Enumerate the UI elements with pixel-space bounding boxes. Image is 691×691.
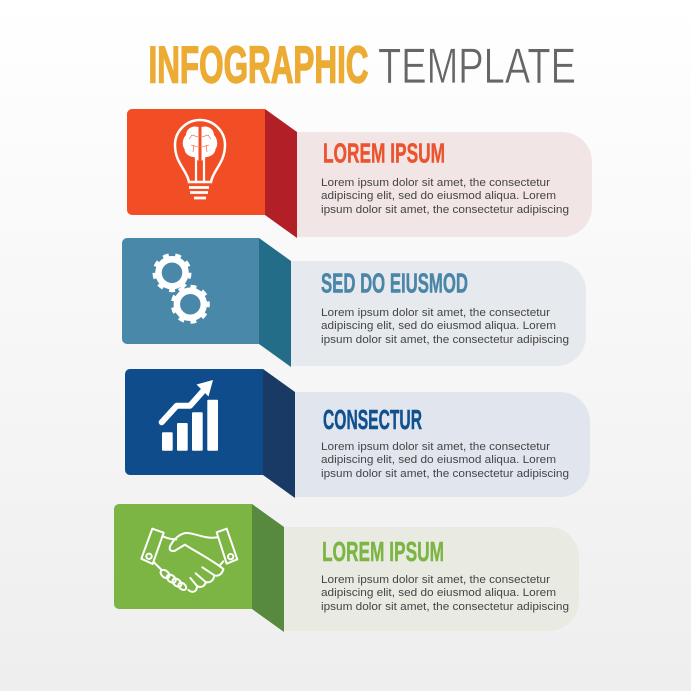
heading: SED DO EIUSMOD (321, 268, 468, 298)
icon tile (127, 109, 265, 215)
icon tile (125, 369, 263, 475)
text card (291, 261, 586, 366)
body text (321, 441, 569, 480)
body text: adipiscing elit, sed do eiusmod aliqua. Lorem (321, 454, 556, 466)
body text: ipsum dolor sit amet, the consectetur adipiscing (321, 468, 569, 480)
heading: LOREM IPSUM (323, 138, 445, 168)
body text: adipiscing elit, sed do eiusmod aliqua. Lorem (321, 190, 556, 202)
icon tile (114, 504, 252, 609)
panel: sed do eiusmod blue (122, 238, 586, 367)
text card (297, 132, 592, 237)
panel: consectur navy (125, 369, 590, 498)
body text: ipsum dolor sit amet, the consectetur adipiscing (321, 334, 569, 346)
body text (321, 307, 569, 346)
panel: lorem ipsum green (114, 504, 579, 632)
title: INFOGRAPHIC (148, 36, 368, 94)
body text: Lorem ipsum dolor sit amet, the consectetur (321, 177, 550, 189)
fold (259, 238, 291, 367)
body text: ipsum dolor sit amet, the consectetur adipiscing (321, 601, 569, 613)
icon: growth chart (162, 380, 218, 451)
body text: Lorem ipsum dolor sit amet, the consectetur (321, 441, 550, 453)
body text: Lorem ipsum dolor sit amet, the consectetur (321, 307, 550, 319)
body text (321, 574, 569, 613)
icon: handshake (141, 529, 237, 592)
text card (295, 392, 590, 497)
body text: ipsum dolor sit amet, the consectetur adipiscing (321, 204, 569, 216)
fold (265, 109, 297, 238)
heading: LOREM IPSUM (322, 536, 444, 567)
body text: Lorem ipsum dolor sit amet, the consectetur (321, 574, 550, 586)
icon: gears (154, 255, 208, 322)
text card (284, 527, 579, 631)
panel: lorem ipsum red (127, 109, 592, 238)
body text: adipiscing elit, sed do eiusmod aliqua. Lorem (321, 320, 556, 332)
icon tile (122, 238, 259, 344)
body text: adipiscing elit, sed do eiusmod aliqua. Lorem (321, 587, 556, 599)
fold (252, 504, 284, 632)
body text (321, 177, 569, 216)
heading: CONSECTUR (323, 404, 422, 435)
icon: light bulb with brain (175, 120, 225, 198)
fold (263, 369, 295, 498)
title: TEMPLATE (378, 38, 576, 94)
